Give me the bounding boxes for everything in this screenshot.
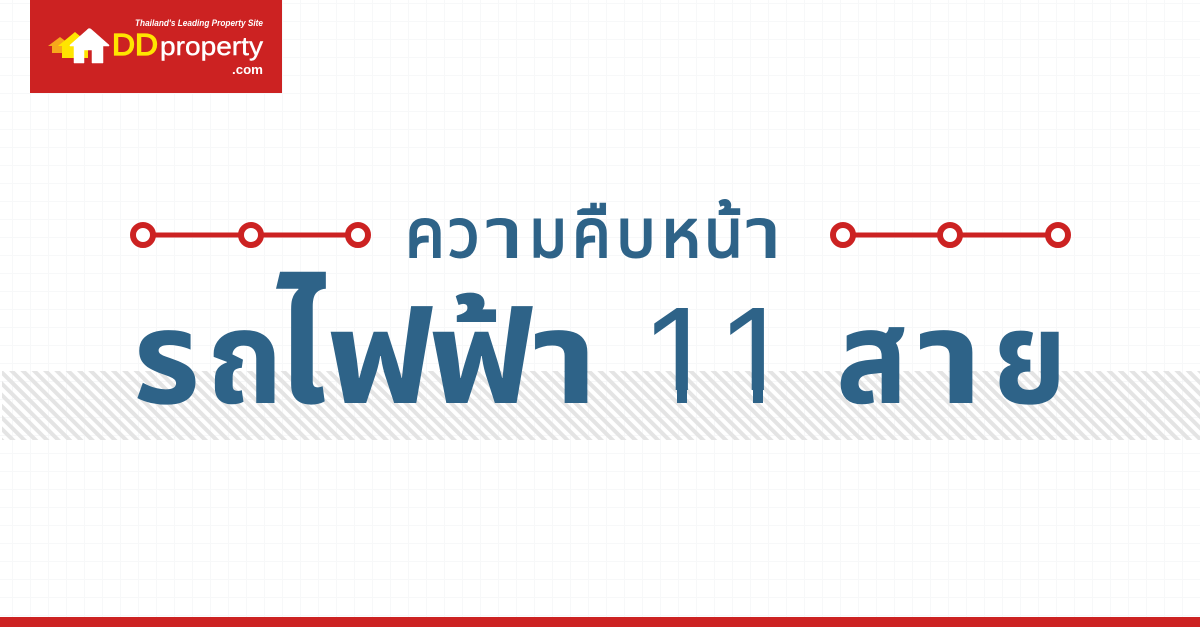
heading line 1: ม — [529, 196, 567, 272]
heading line 1: น้ — [704, 196, 743, 272]
heading line 2: 1 — [717, 279, 794, 433]
heading line 1: ค — [405, 196, 445, 272]
heading line 1: ว — [448, 196, 480, 272]
logo .com: .com — [232, 63, 263, 77]
heading line 1 — [405, 196, 781, 272]
logo tagline: Thailand's Leading Property Site — [135, 18, 264, 29]
heading line 1: า — [487, 196, 523, 272]
icon: white house — [70, 28, 109, 63]
icon: orange house — [48, 37, 72, 53]
heading line 2: ฟ — [326, 285, 434, 431]
heading line 1: า — [747, 196, 781, 272]
heading line 2: ฟ้ — [428, 285, 534, 431]
right rail line icon — [833, 225, 1068, 245]
heading line 2: ร — [133, 285, 200, 431]
heading line 2: ถ — [207, 285, 283, 431]
heading line 2: า — [532, 285, 598, 431]
heading line 1: คื — [572, 196, 611, 272]
icon: yellow house — [58, 32, 92, 58]
heading line 2: ย — [993, 285, 1067, 431]
heading line 2: ไ — [276, 261, 326, 437]
heading line 1: ห — [661, 196, 701, 272]
heading line 2: 1 — [641, 279, 718, 433]
hatched band — [2, 371, 1200, 440]
heading line 2 — [137, 272, 1059, 405]
heading line 2: ส — [836, 285, 908, 431]
heading line 2: า — [917, 285, 983, 431]
logo wordmark DD: DD — [112, 27, 158, 62]
bottom red bar — [0, 617, 1200, 627]
heading line 1: บ — [616, 196, 656, 272]
logo wordmark property: property — [160, 31, 263, 61]
left rail line icon — [133, 225, 368, 245]
logo — [30, 0, 282, 93]
